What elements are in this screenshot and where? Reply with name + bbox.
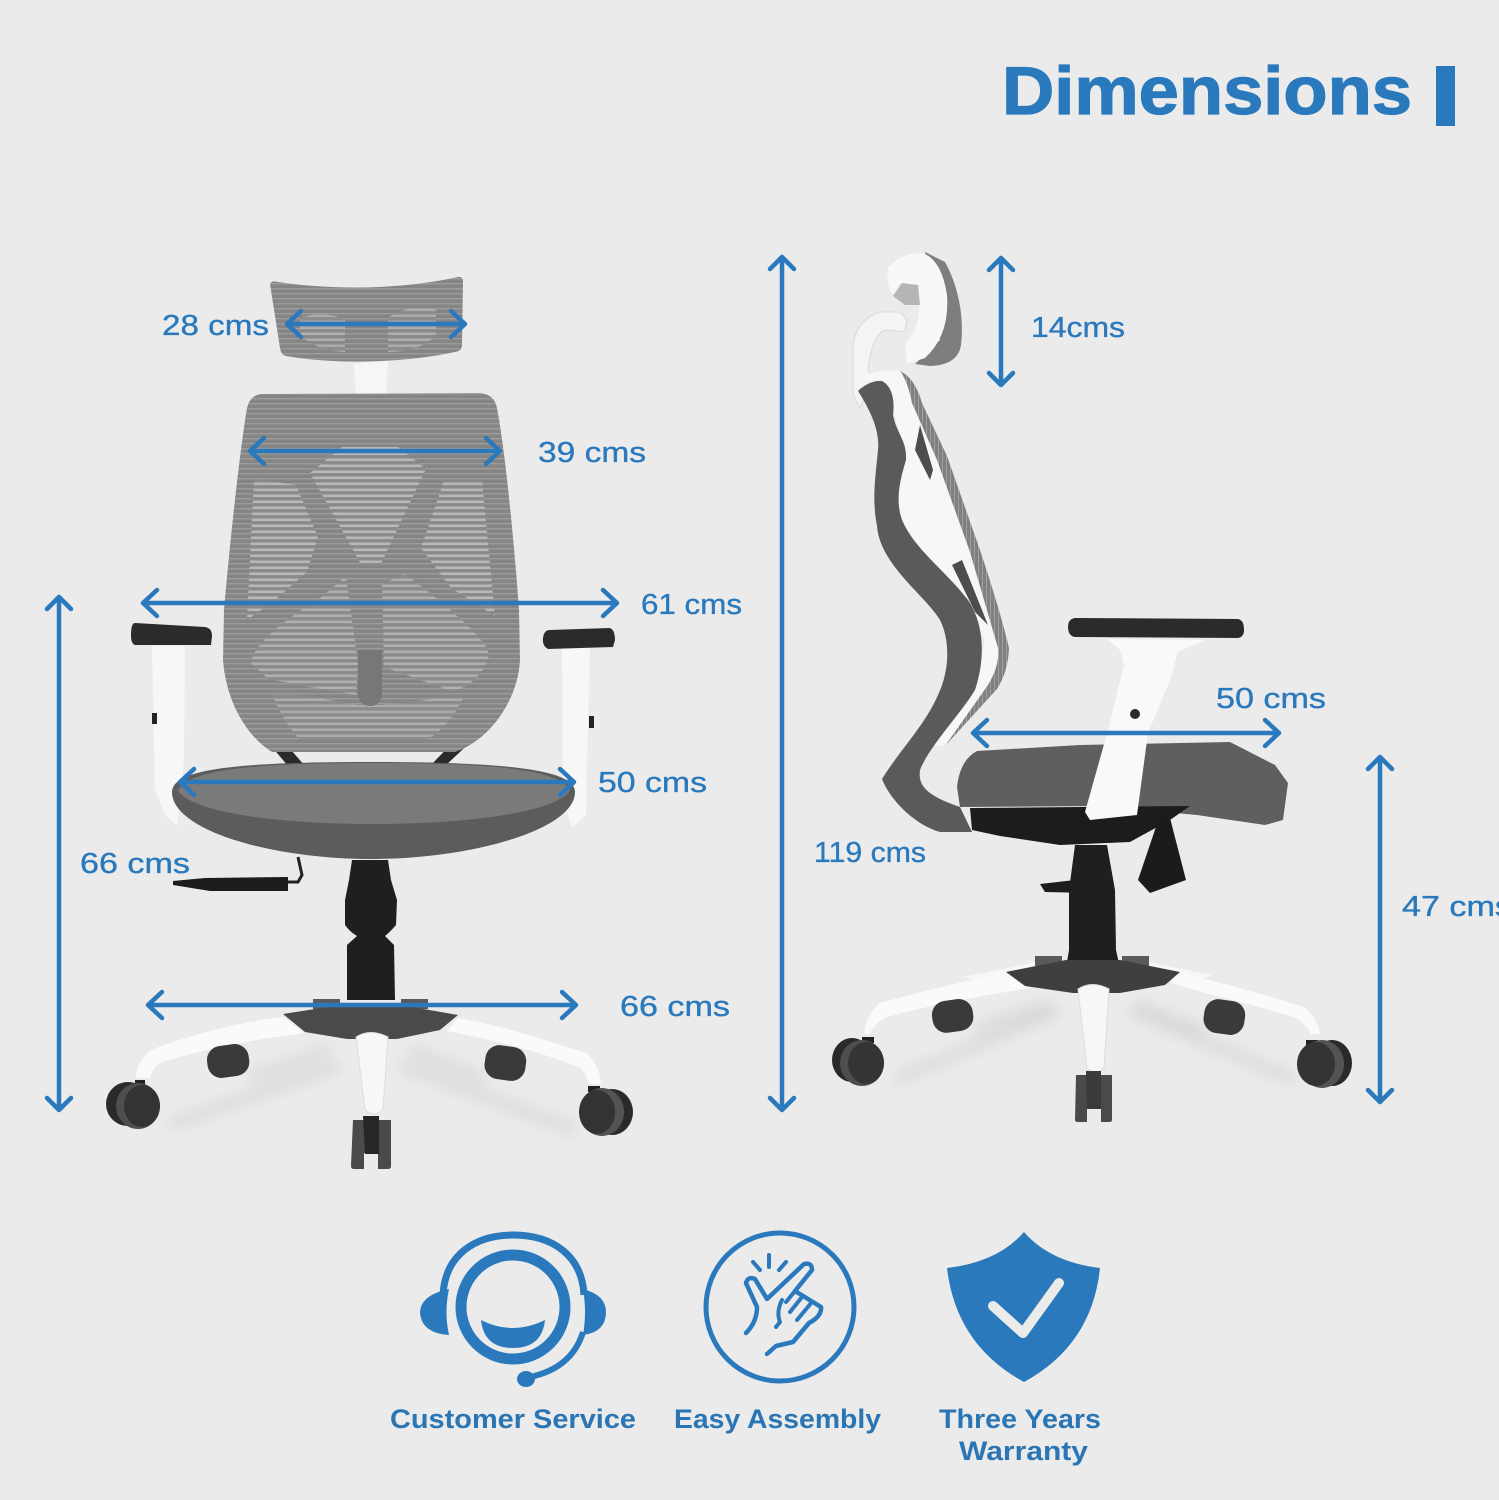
headrest <box>853 252 962 408</box>
dimension: headrest width 28 cms: 28 cms <box>162 310 269 342</box>
caster front <box>351 1116 391 1169</box>
headrest <box>270 277 463 394</box>
seat mechanism <box>970 806 1190 845</box>
dimension: back width 39 cms: 39 cms <box>538 437 646 469</box>
dimension: headrest height 14cms: 14cms <box>1031 312 1125 344</box>
rear base parts <box>964 956 1212 985</box>
caster front <box>1075 1071 1112 1122</box>
caster left <box>832 1037 884 1086</box>
dimension: overall width 61 cms <box>143 589 742 621</box>
dimension: total height 119 cms <box>770 257 926 1110</box>
floor shadows <box>170 1050 575 1130</box>
height lever <box>1040 860 1090 893</box>
dimension: seat width 50 cms <box>180 767 707 799</box>
dimension: headrest height 14cms <box>989 258 1125 385</box>
dimension: total height 119 cms: 119 cms <box>814 837 926 869</box>
left armrest <box>131 623 212 826</box>
back frame dark <box>858 381 982 832</box>
label: Easy Assembly <box>674 1404 881 1434</box>
back mesh edge <box>900 371 1009 746</box>
label <box>939 1404 1101 1466</box>
caster left <box>106 1080 160 1129</box>
dimension arrows and labels <box>47 257 1499 1110</box>
caster rear right <box>1202 997 1247 1037</box>
mesh light panels <box>247 447 495 740</box>
base legs <box>136 1017 601 1084</box>
dimension: armrest height 66 cms: 66 cms <box>80 848 190 880</box>
right armrest <box>543 628 615 828</box>
casters <box>106 1042 633 1169</box>
dimension: seat height 47 cms: 47 cms <box>1402 891 1499 923</box>
gas lift column <box>1066 845 1120 968</box>
label: Three Years <box>939 1404 1101 1434</box>
side view chair <box>832 252 1352 1122</box>
caster rear left <box>930 997 975 1035</box>
inner slats <box>915 425 988 625</box>
casters <box>832 997 1352 1122</box>
front leg <box>1078 984 1109 1072</box>
caster right <box>1297 1040 1352 1088</box>
caster rear right <box>483 1043 528 1083</box>
base legs <box>864 973 1320 1035</box>
base hub <box>1006 960 1180 993</box>
adjustment lever <box>173 857 302 891</box>
dimension: headrest width 28 cms <box>162 310 465 342</box>
dimension: seat height 47 cms <box>1368 757 1499 1102</box>
rear base plates <box>313 999 428 1009</box>
dimension: seat depth 50 cms <box>973 683 1326 746</box>
label: Customer Service <box>390 1404 636 1434</box>
feature: three years warranty <box>939 1232 1101 1466</box>
dimension: base width 66 cms <box>148 991 730 1023</box>
seat cushion <box>172 762 575 859</box>
dimension: seat width 50 cms: 50 cms <box>598 767 707 799</box>
floor shadows <box>895 1005 1295 1080</box>
feature: customer service <box>390 1235 636 1434</box>
dimension: overall width 61 cms: 61 cms <box>641 589 742 621</box>
icon: snapping hand <box>706 1233 854 1381</box>
armrest support <box>1085 639 1205 820</box>
caster rear left <box>205 1042 251 1080</box>
tilt handle <box>1138 815 1186 893</box>
icon: shield with check <box>947 1232 1100 1382</box>
backrest mesh <box>223 393 520 752</box>
dimension: back width 39 cms <box>250 437 646 469</box>
front view chair <box>106 277 633 1169</box>
seat cushion <box>957 742 1288 825</box>
front leg <box>356 1032 388 1114</box>
label: Warranty <box>959 1436 1088 1466</box>
dimension: base width 66 cms: 66 cms <box>620 991 730 1023</box>
backrest frame legs <box>262 735 478 766</box>
dimension: armrest height 66 cms <box>47 597 190 1110</box>
lumbar spine <box>358 650 382 706</box>
icon: headset <box>420 1235 606 1387</box>
feature: easy assembly <box>674 1233 881 1434</box>
caster right <box>579 1086 633 1136</box>
armrest pad <box>1068 618 1244 638</box>
white back shell <box>863 370 1009 746</box>
gas lift column <box>345 860 397 1000</box>
title: Dimensions <box>1002 53 1412 129</box>
dimension: seat depth 50 cms: 50 cms <box>1216 683 1326 715</box>
base hub <box>283 1004 458 1039</box>
